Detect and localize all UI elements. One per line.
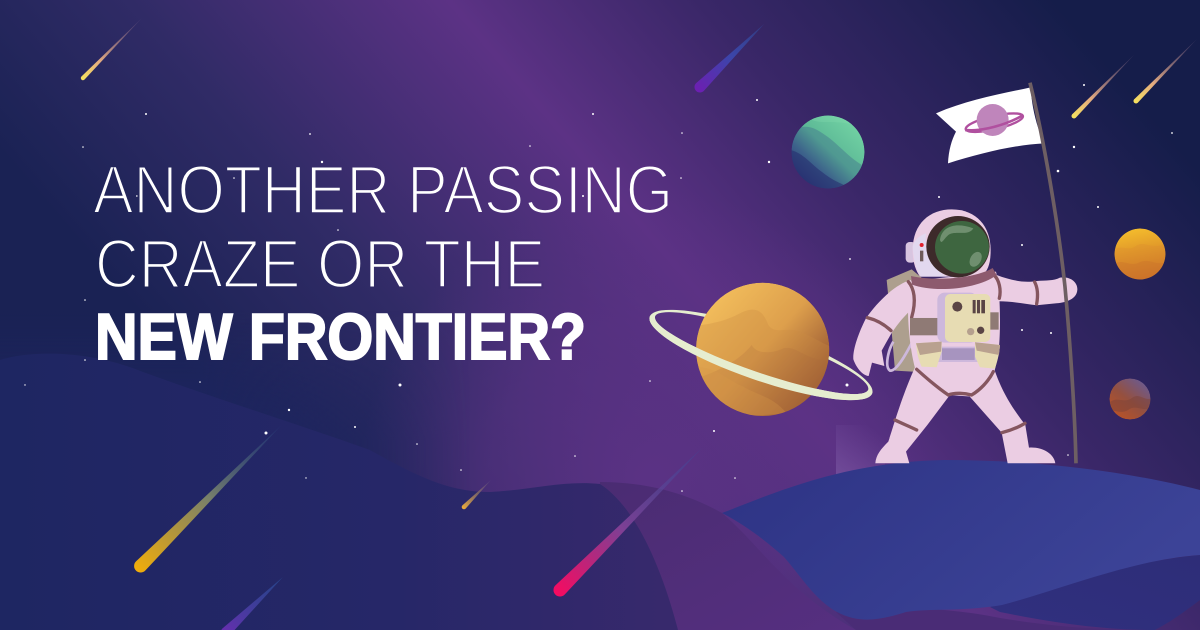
- light beam behind astronaut: [836, 425, 885, 495]
- astronaut with flag: [853, 83, 1077, 463]
- hill: dark blue right: [990, 555, 1200, 630]
- flag: [936, 87, 1044, 163]
- belt: [910, 312, 999, 335]
- helmet: [906, 209, 991, 277]
- planet: orange: [1114, 228, 1166, 282]
- oxygen hose: [887, 337, 915, 371]
- planet: red: [1110, 378, 1152, 420]
- flag planet emblem: [964, 104, 1024, 136]
- meteor: top right one: [1070, 53, 1136, 120]
- flag pole: [1030, 83, 1076, 463]
- suit seams: [867, 275, 1037, 433]
- meteor: pink: [551, 443, 707, 599]
- chest control box: [937, 293, 990, 343]
- meteor: yellow large: [131, 421, 286, 575]
- ring front: [649, 316, 872, 400]
- arm left: [853, 280, 918, 376]
- background purple glow: [360, 190, 1200, 630]
- backpack: [887, 269, 940, 373]
- meteor: top purple: [692, 20, 768, 95]
- planet: green: [792, 116, 864, 188]
- meteor: top left: [80, 17, 143, 81]
- title line 1: ANOTHER PASSING: [93, 152, 673, 228]
- utility pouches and waist strap: [916, 342, 1000, 369]
- ring back: [641, 293, 880, 417]
- title line 2: CRAZE OR THE: [95, 226, 545, 302]
- legs: [875, 367, 1055, 463]
- meteor: small orange: [461, 479, 492, 510]
- title line 3 bold: NEW FRONTIER?: [95, 300, 586, 373]
- title: [93, 152, 673, 373]
- planet: saturn with ring: [641, 283, 880, 420]
- navy haze softening the left hill edge: [186, 387, 230, 401]
- meteor: top right two: [1132, 37, 1199, 105]
- stars: [24, 84, 1173, 492]
- planet body: [696, 282, 830, 416]
- meteor: purple bottom: [219, 574, 286, 630]
- hill: blue foreground: [722, 460, 1200, 620]
- arm right with hand: [997, 275, 1077, 305]
- torso: [908, 272, 1000, 397]
- collar: [911, 268, 997, 289]
- hills: background landscape: [0, 354, 1155, 630]
